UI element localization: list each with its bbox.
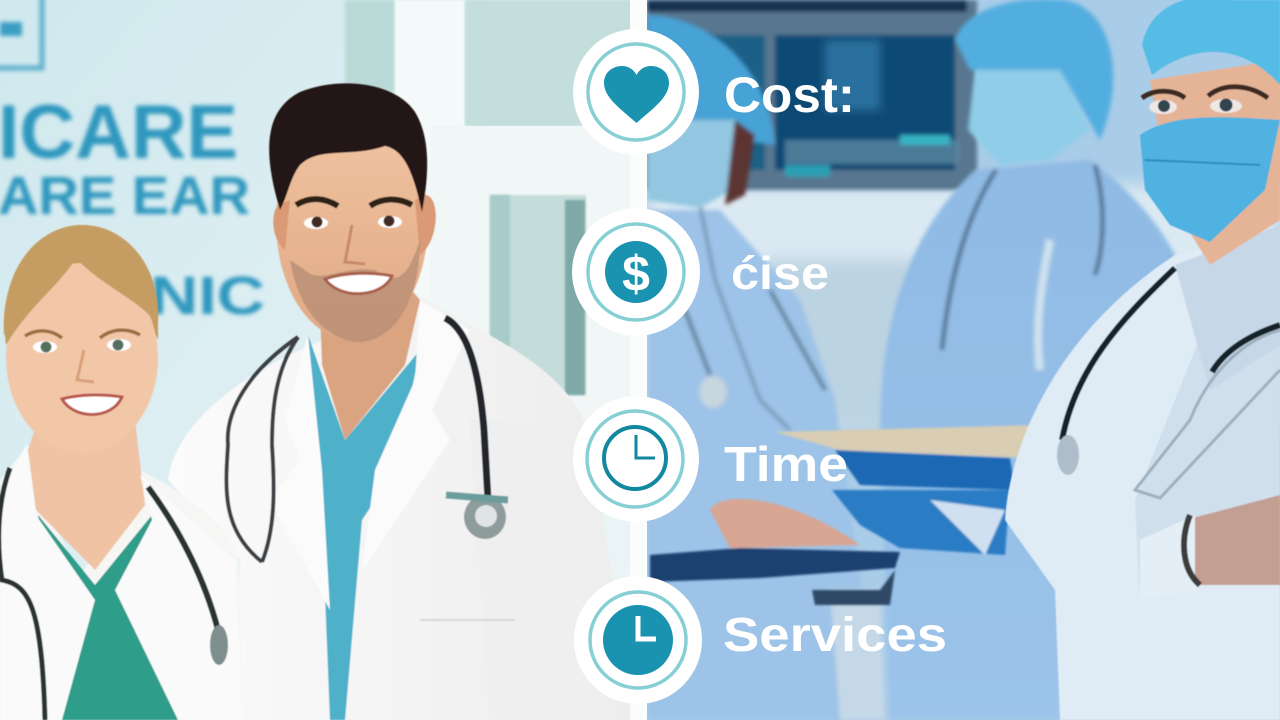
neck and chest bbox=[320, 292, 420, 440]
hospital room background bbox=[647, 0, 1280, 720]
label: cost: Cost: bbox=[724, 67, 855, 123]
icon: dollar badge: $ bbox=[622, 246, 650, 302]
person: female doctor bbox=[0, 225, 243, 720]
label: services: Services bbox=[723, 609, 947, 662]
clinic wall background bbox=[0, 0, 632, 720]
person: male doctor bbox=[168, 83, 632, 720]
hair top bbox=[4, 225, 158, 345]
panel: right hospital staff photo bbox=[647, 0, 1280, 720]
stethoscope bbox=[226, 337, 298, 562]
icon: heart badge bbox=[573, 29, 699, 155]
eyes and brows bbox=[296, 199, 412, 206]
wall signage: blurred clinic lettering: ARE EAR bbox=[0, 166, 250, 226]
hair back bbox=[4, 225, 158, 340]
timeline item: cost bbox=[573, 29, 855, 155]
forearm bbox=[1185, 495, 1280, 585]
timeline item: time bbox=[573, 396, 848, 522]
wall signage: blurred clinic lettering bbox=[0, 0, 265, 326]
eyes bbox=[25, 330, 140, 338]
mask bbox=[1140, 117, 1280, 242]
arm and clipboard group bbox=[650, 425, 1038, 605]
icon: dollar badge bbox=[572, 208, 700, 336]
neck bbox=[28, 420, 145, 570]
lapels bbox=[304, 336, 331, 610]
face bbox=[6, 262, 158, 432]
scrubs bbox=[38, 515, 178, 720]
timeline item: services bbox=[574, 576, 947, 704]
lapels bbox=[24, 446, 96, 720]
stethoscope bbox=[1062, 268, 1175, 440]
monitor screen bbox=[647, 0, 977, 190]
stethoscope bbox=[0, 468, 45, 720]
person: surgeon centre, blurred bbox=[880, 0, 1190, 720]
eyes bbox=[1142, 87, 1268, 98]
person: foreground surgeon bbox=[1005, 0, 1280, 720]
cap bbox=[1142, 0, 1280, 85]
person: surgeon left, blurred bbox=[647, 15, 885, 720]
smile bbox=[325, 273, 392, 294]
icon: clock outline badge bbox=[573, 396, 699, 522]
head bbox=[276, 104, 428, 340]
coat bbox=[1005, 230, 1280, 720]
wall signage: blurred clinic lettering: NIC bbox=[150, 266, 265, 326]
label: time: Time bbox=[724, 438, 848, 492]
vertical divider line bbox=[630, 0, 647, 720]
wall signage: blurred clinic lettering: ICARE bbox=[0, 90, 238, 175]
icon: solid clock badge bbox=[574, 576, 702, 704]
panel: left clinic photo bbox=[0, 0, 632, 720]
face bbox=[1150, 60, 1280, 265]
smile bbox=[62, 395, 122, 415]
timeline item: price bbox=[572, 208, 829, 336]
coat bbox=[0, 446, 238, 604]
scrubs bbox=[308, 335, 420, 720]
hair bbox=[269, 83, 427, 212]
coat bbox=[168, 296, 632, 720]
stubble bbox=[290, 240, 420, 342]
label: cise: ćise bbox=[731, 247, 829, 299]
pocket bbox=[420, 619, 515, 621]
